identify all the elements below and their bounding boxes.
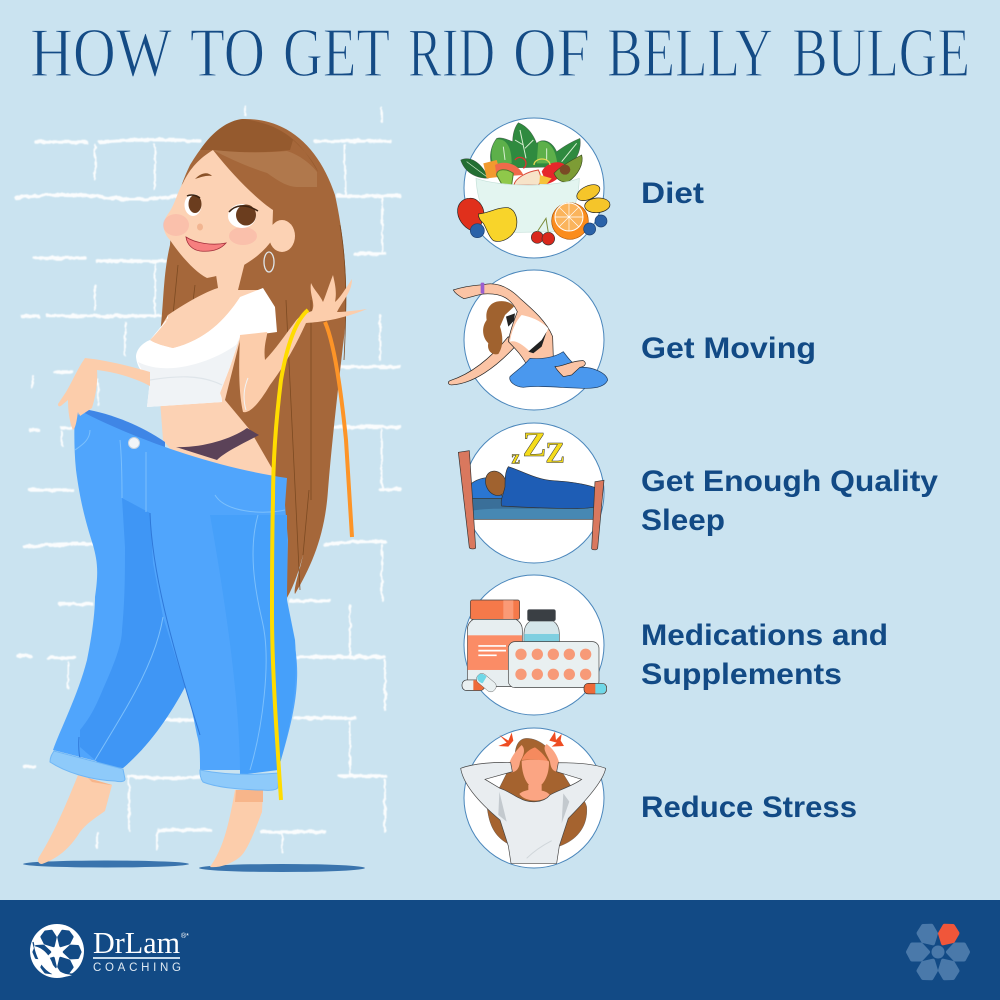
feet: [38, 775, 263, 867]
medications label: Supplements: [641, 658, 842, 691]
title: TO: [190, 15, 265, 92]
title: OF: [513, 15, 590, 92]
medications circle: [464, 575, 604, 715]
step 5: reduce stress: [461, 728, 857, 868]
white top: [136, 288, 277, 407]
sleep letters zzz: Z: [545, 438, 565, 470]
stress label: Reduce Stress: [641, 791, 857, 824]
jeans button: [128, 438, 140, 448]
nose: [197, 224, 203, 230]
step 2: get moving: [448, 270, 816, 410]
shadows under feet: [23, 860, 365, 872]
back hair: [160, 119, 346, 603]
icon: yoga side stretch: [448, 283, 608, 388]
fringe highlight: [213, 150, 317, 187]
jeans: [53, 408, 297, 775]
diet label: Diet: [641, 177, 704, 210]
eyebrow: [195, 173, 212, 179]
title: RID: [408, 15, 495, 92]
sleep letters zzz: z: [511, 447, 520, 468]
medications label: Medications and: [641, 619, 888, 652]
left arm and hand: [58, 358, 150, 430]
moving circle: [464, 270, 604, 410]
eyes: [184, 194, 258, 228]
underwear: [176, 428, 259, 460]
logo rule: [93, 957, 180, 959]
flower mark: [908, 922, 968, 982]
logo: DrLam Coaching: [30, 924, 189, 978]
title: BELLY: [607, 15, 773, 92]
jeans cuffs: [50, 751, 279, 790]
logo wordmark: DrLam: [93, 926, 180, 960]
sleep circle: [464, 423, 604, 563]
logo emblem: [30, 924, 84, 978]
stress circle: [464, 728, 604, 868]
sleep letters zzz: [511, 425, 565, 470]
raised arm and hand: [239, 275, 367, 412]
title: [30, 15, 970, 92]
step 3: sleep: [458, 423, 938, 563]
icon: bottles and blister pack: [462, 600, 607, 694]
icon: stressed woman holding head: [461, 732, 606, 863]
title: GET: [283, 15, 390, 92]
orange measuring tape: [325, 322, 352, 537]
moving label: Get Moving: [641, 332, 816, 365]
diet circle: [464, 118, 604, 258]
logo subtitle: COACHING: [93, 962, 181, 974]
brick wall background: [16, 107, 400, 852]
top hair: [200, 119, 318, 172]
sleep letters zzz: Z: [523, 425, 546, 464]
head: [163, 119, 318, 278]
face: [164, 150, 273, 278]
illustration: woman in oversized jeans: [23, 119, 367, 872]
title: HOW: [30, 15, 172, 92]
yellow measuring tape: [272, 310, 308, 800]
icon: salad bowl with fruit: [458, 123, 611, 245]
ear and earring: [264, 220, 295, 272]
sleep label: Sleep: [641, 504, 725, 537]
torso skin: [150, 262, 275, 485]
mouth: [186, 237, 226, 251]
footer band: [0, 900, 1000, 1000]
registered mark: ®*: [181, 932, 189, 940]
step 1: diet: [458, 118, 704, 258]
blush: [163, 214, 257, 245]
step 4: medications: [462, 575, 888, 715]
icon: person sleeping in bed: [458, 425, 604, 550]
sleep label: Get Enough Quality: [641, 465, 938, 498]
